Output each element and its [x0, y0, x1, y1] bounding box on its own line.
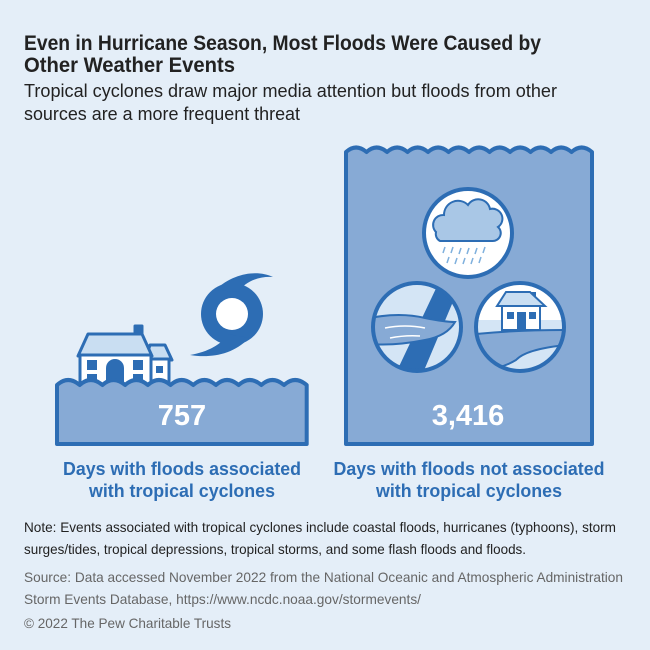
label: right	[334, 459, 604, 501]
value: 3,416: 3,416	[432, 400, 504, 432]
icon: rain cloud	[424, 189, 512, 277]
source: Storm Events Database, https://www.ncdc.noaa.gov/stormevents/	[24, 591, 421, 607]
water box	[346, 148, 592, 444]
label: left: Days with floods associated	[63, 459, 301, 479]
panel: non-tropical floods	[346, 148, 592, 444]
note: surges/tides, tropical depressions, tropical storms, and some flash floods and floods.	[24, 541, 526, 557]
subtitle: sources are a more frequent threat	[24, 103, 300, 124]
subtitle: Tropical cyclones draw major media attention but floods from other	[24, 80, 557, 101]
source: Source: Data accessed November 2022 from the National Oceanic and Atmospheric Administration	[24, 569, 623, 585]
note	[24, 519, 616, 557]
label: left: with tropical cyclones	[88, 481, 275, 501]
icon: house	[78, 326, 172, 387]
title: Other Weather Events	[24, 54, 235, 77]
source	[24, 569, 623, 607]
icon: flooded road	[370, 280, 461, 380]
water box	[57, 380, 307, 444]
title	[24, 32, 541, 77]
label: left	[63, 459, 301, 501]
value: 757: 757	[158, 400, 206, 432]
subtitle	[24, 80, 557, 124]
title: Even in Hurricane Season, Most Floods Were Caused by	[24, 32, 541, 55]
label: right: Days with floods not associated	[334, 459, 604, 479]
label: right: with tropical cyclones	[375, 481, 562, 501]
note: Note: Events associated with tropical cyclones include coastal floods, hurricanes (typhoons), storm	[24, 519, 616, 535]
icon: hurricane	[190, 273, 273, 356]
copyright: © 2022 The Pew Charitable Trusts	[24, 615, 231, 631]
icon: flooded house	[474, 281, 566, 373]
panel: tropical cyclone floods	[57, 273, 307, 444]
